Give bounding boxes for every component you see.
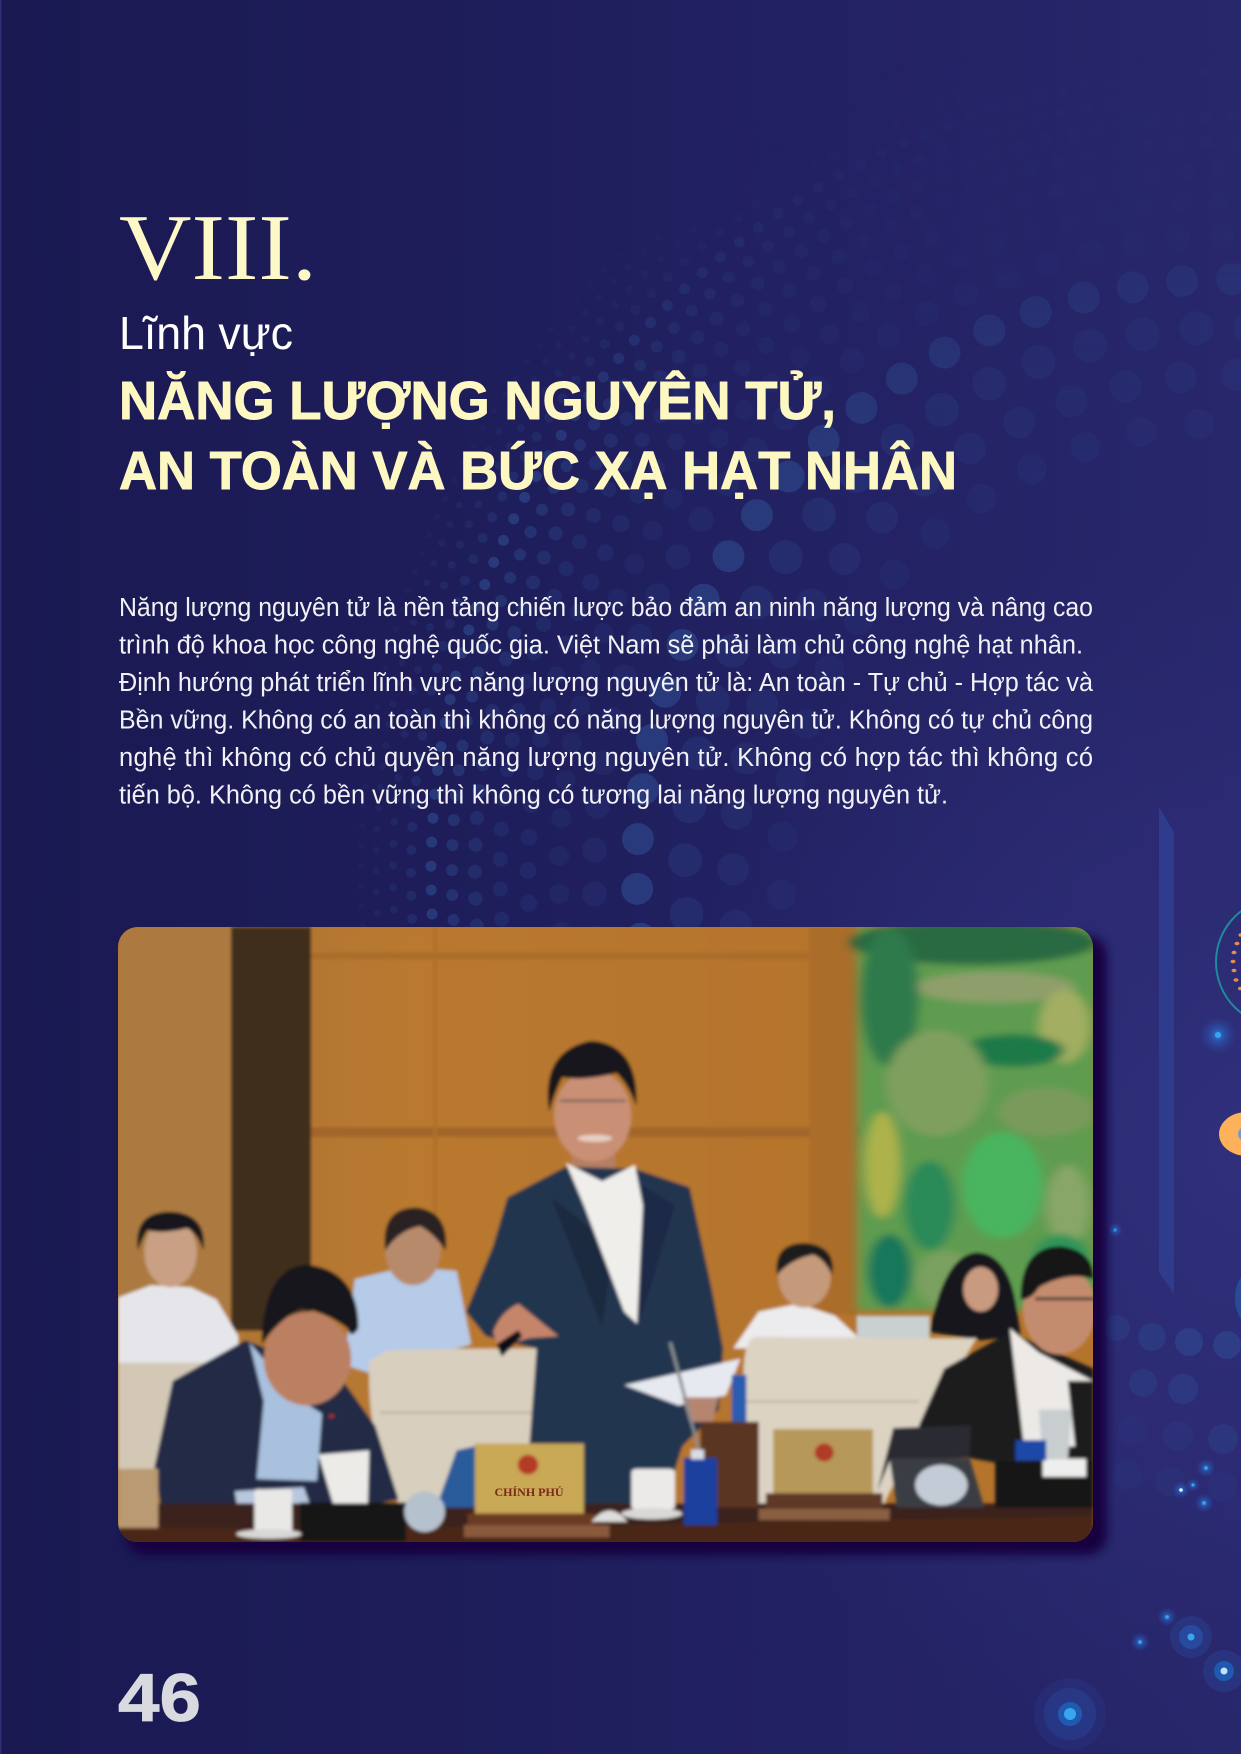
background people <box>118 1208 1021 1373</box>
name placard text: CHÍNH PHỦ <box>494 1485 564 1499</box>
wall panels <box>118 927 861 1541</box>
heading <box>119 370 957 501</box>
intro paragraph: nghệ thì không có chủ quyền năng lượng nguyên tử. Không có hợp tác thì không có <box>119 744 1093 772</box>
chairs <box>118 1337 977 1516</box>
right edge blue blob <box>1235 1264 1241 1332</box>
heading: NĂNG LƯỢNG NGUYÊN TỬ, <box>119 370 836 431</box>
intro paragraph <box>119 594 1094 810</box>
desk and objects <box>118 1422 1093 1544</box>
glowing particles <box>1034 1016 1241 1750</box>
halftone dot arcs <box>373 237 1241 927</box>
intro paragraph: Định hướng phát triển lĩnh vực năng lượng nguyên tử là: An toàn - Tự chủ - Hợp tác và <box>119 669 1094 697</box>
intro paragraph: trình độ khoa học công nghệ quốc gia. Việt Nam sẽ phải làm chủ công nghệ hạt nhân. <box>119 632 1083 660</box>
bottom right halftone dots <box>1104 1315 1241 1502</box>
heading: AN TOÀN VÀ BỨC XẠ HẠT NHÂN <box>119 440 957 501</box>
standing minister <box>466 1041 746 1516</box>
intro paragraph: tiến bộ. Không có bền vững thì không có tương lai năng lượng nguyên tử. <box>119 782 948 810</box>
section number: VIII. <box>119 196 317 300</box>
teal ring with orange dots <box>1216 898 1241 1026</box>
page number: 46 <box>118 1660 201 1736</box>
vertical accent band <box>1159 807 1174 1294</box>
seated man left <box>155 1265 398 1536</box>
subtitle: Lĩnh vực <box>119 307 293 359</box>
photo: minister speaking at the meeting <box>118 920 1097 1544</box>
seated man right <box>919 1246 1096 1467</box>
painting <box>850 920 1097 1310</box>
intro paragraph: Bền vững. Không có an toàn thì không có năng lượng nguyên tử. Không có tự chủ công <box>119 706 1093 734</box>
intro paragraph: Năng lượng nguyên tử là nền tảng chiến lược bảo đảm an ninh năng lượng và nâng cao <box>119 594 1093 622</box>
photo drop shadow <box>126 936 1107 1555</box>
orange eye shape <box>1219 1112 1241 1156</box>
